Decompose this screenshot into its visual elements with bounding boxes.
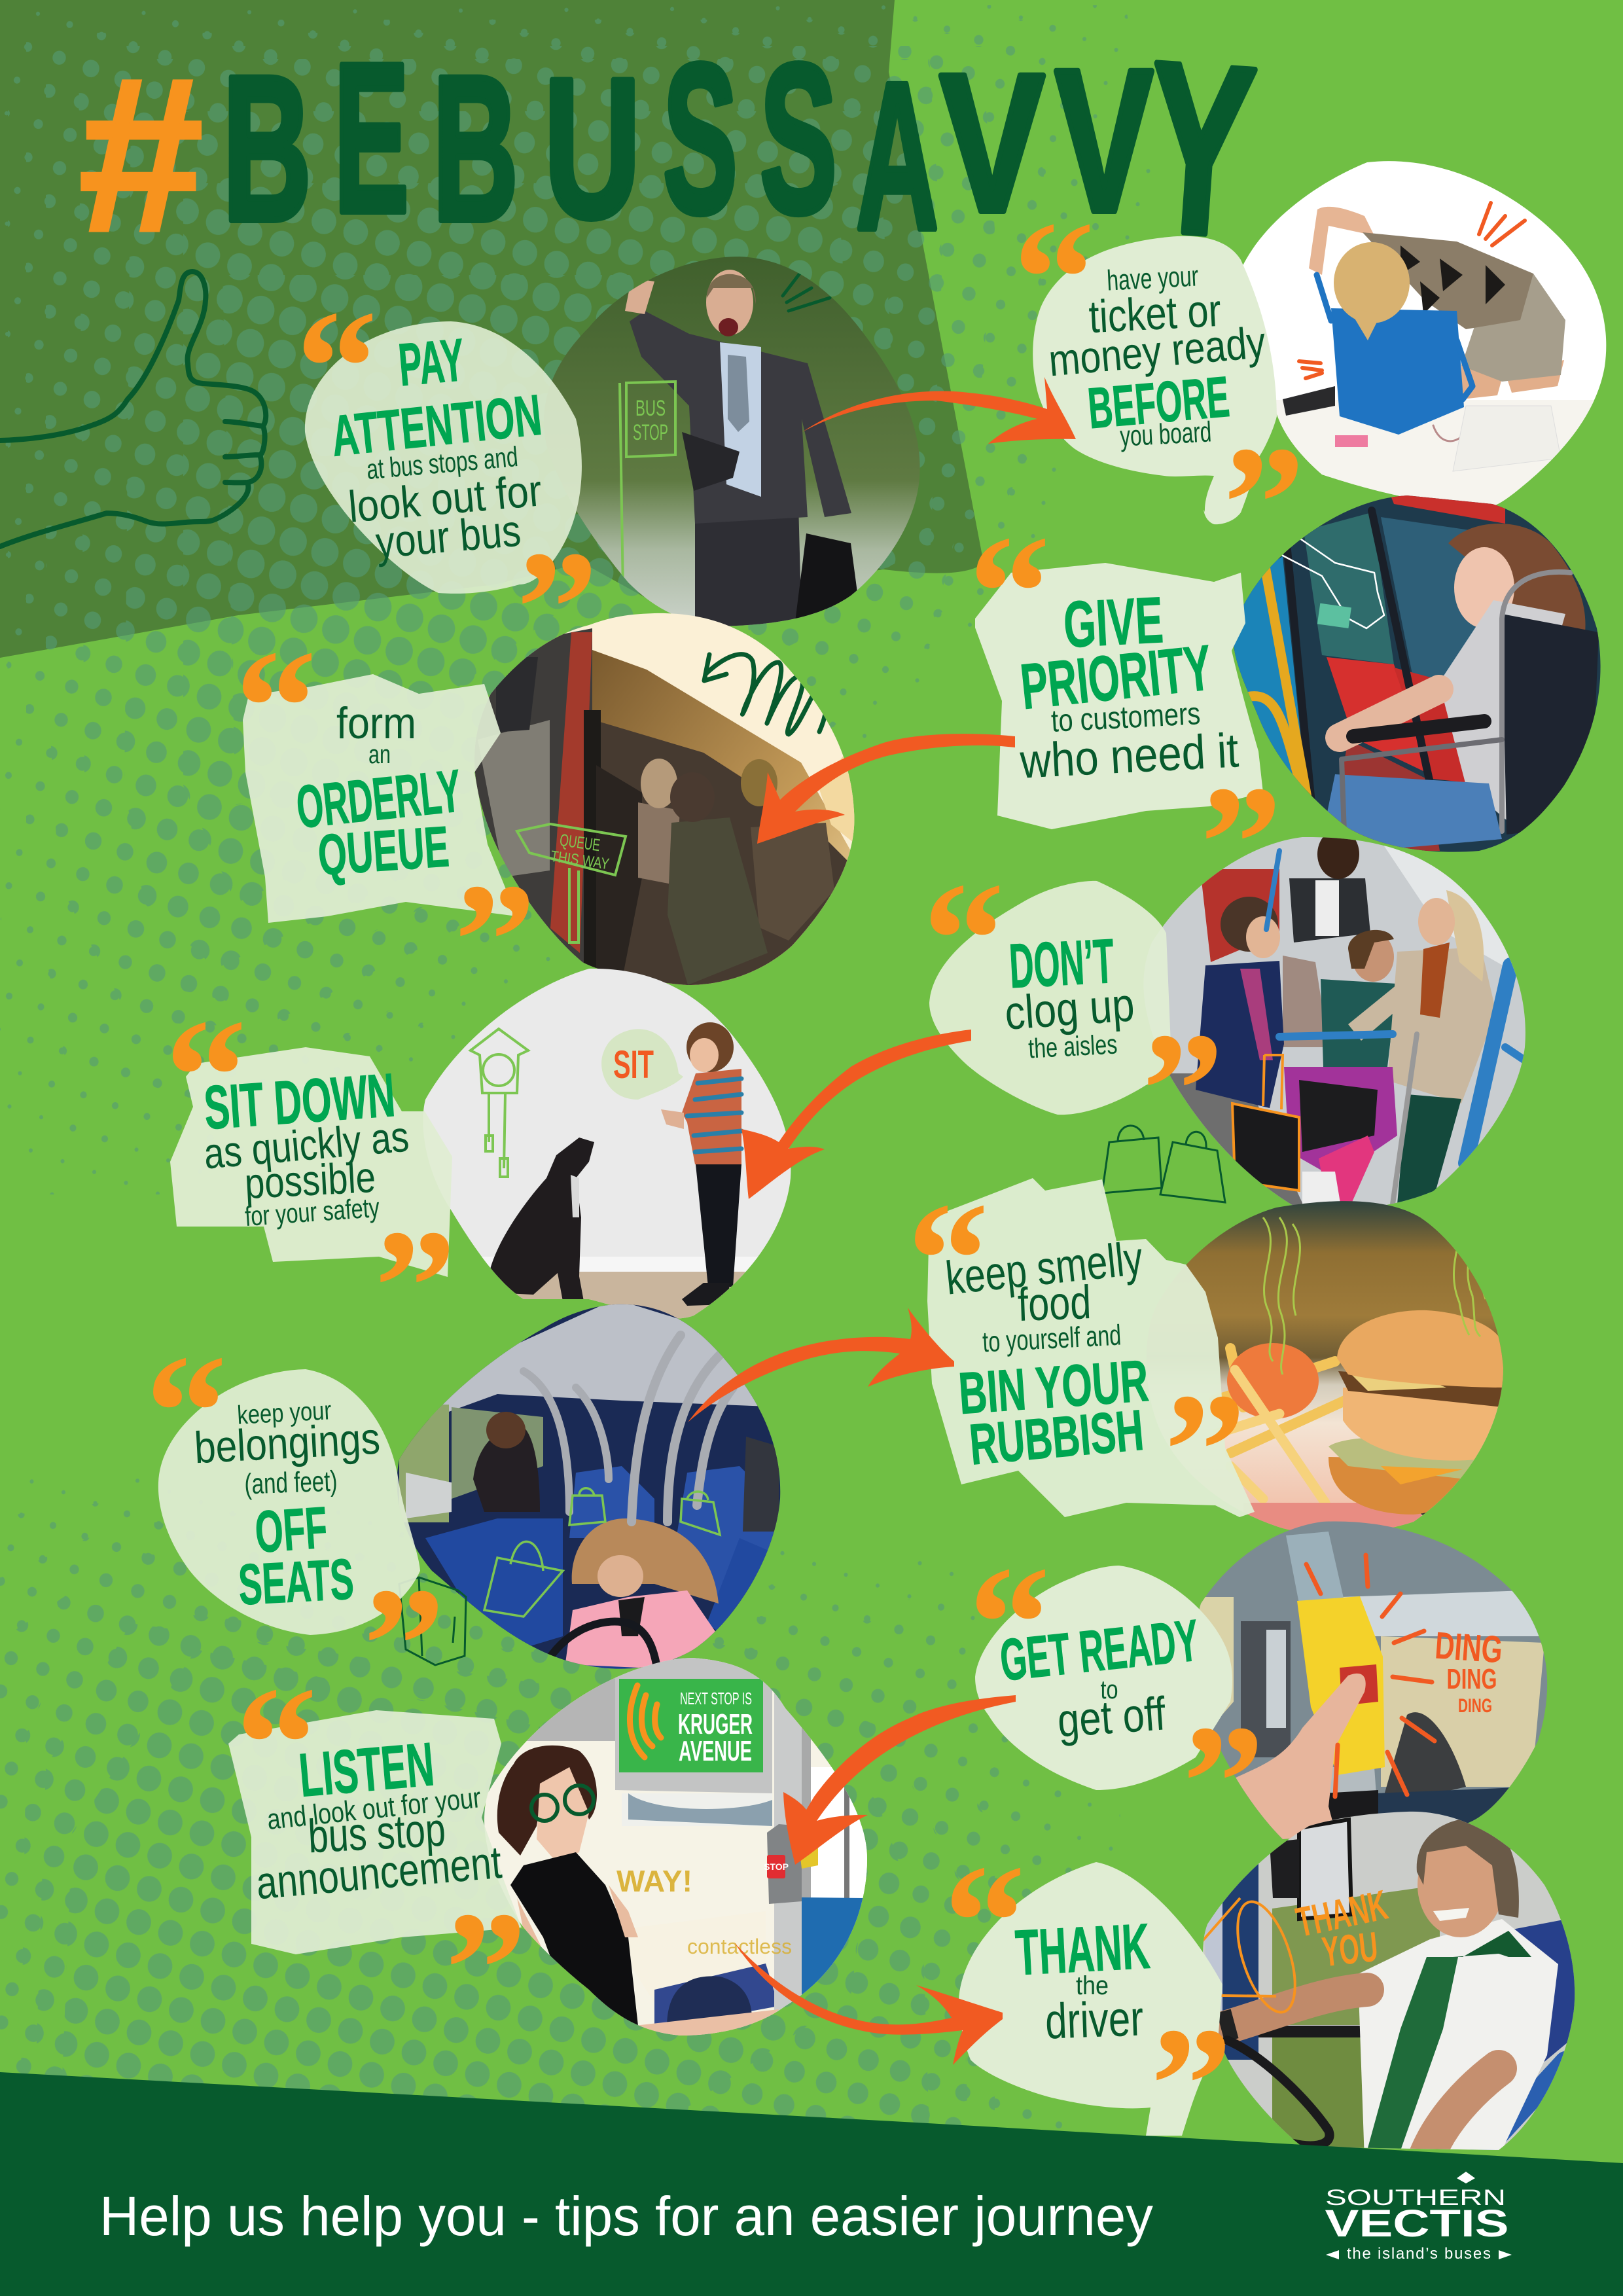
bubble 3: give priority: who need it (1018, 723, 1240, 789)
bubble 6: sit down: for your safety (244, 1192, 380, 1232)
quotation marks: “ (923, 849, 1005, 1030)
bubble 5: don't clog up: DON’T (1008, 926, 1116, 1001)
arrow: aisles to sit down (741, 1030, 971, 1199)
quotation marks: ” (363, 1554, 445, 1736)
bubble 10: listen: announcement (254, 1837, 504, 1909)
quotation marks: ” (1200, 753, 1282, 934)
bubble 10: listen: bus stop (307, 1804, 447, 1863)
quotation marks: “ (236, 1653, 317, 1835)
sketch: DING text: DING (1458, 1695, 1492, 1717)
dark green background shape (0, 0, 984, 658)
bubble 9: get ready to get off: to (1101, 1676, 1118, 1704)
bubble 4: form an orderly queue: an (368, 740, 391, 769)
quotation marks: ” (454, 850, 536, 1031)
next stop screen: KRUGER (678, 1708, 753, 1740)
title: #BEBUSSAVVY: V (1055, 27, 1154, 254)
sketch: green glasses (531, 1785, 594, 1821)
bubble 9: get ready to get off: GET READY (997, 1608, 1202, 1694)
bubble 4: form an orderly queue (243, 674, 517, 923)
sketch: suitcase over photo (1232, 1055, 1299, 1191)
bubble 6: sit down: possible (243, 1153, 377, 1208)
bubble 2: have your ticket: money ready (1046, 317, 1268, 386)
bubble 11: thank the driver: THANK (1014, 1910, 1151, 1988)
bubble 7: keep smelly food: RUBBISH (967, 1397, 1146, 1477)
sketch: ding lines (1306, 1555, 1435, 1797)
photo: man running for bus (552, 257, 920, 626)
sketch: megaphone (1165, 1895, 1306, 2022)
quotation marks: ” (374, 1196, 456, 1378)
logo: Southern Vectis (1325, 2172, 1512, 2263)
sketch: queue this way sign: THIS WAY (550, 848, 610, 873)
bubble 5: don't clog up: clog up (1003, 978, 1136, 1040)
bubble 2: have your ticket: ticket or (1088, 285, 1222, 342)
bubble 10: listen: LISTEN (296, 1729, 437, 1810)
bubble 3: give priority: PRIORITY (1017, 631, 1215, 723)
speech bubble: SIT (601, 1029, 683, 1100)
bubble 6: sit down: SIT DOWN (202, 1060, 397, 1142)
arrow: get off to listen (783, 1695, 1016, 1865)
bubble 8: keep your belongings (158, 1369, 420, 1635)
quotation marks: “ (969, 502, 1050, 683)
arrow: listen to thank (734, 1943, 1003, 2065)
bubble 3: give priority: to customers (1050, 696, 1201, 739)
quotation marks: “ (165, 986, 247, 1167)
icon: thumbs up outline (0, 272, 266, 547)
quotation marks: ” (516, 518, 598, 699)
bubble 4: form an orderly queue: form (336, 698, 416, 748)
bubble 8: keep your belongings: belongings (193, 1414, 382, 1473)
sketch: thank you: YOU (1320, 1923, 1380, 1975)
sketch: white hand (1281, 539, 1385, 630)
logo: Southern Vectis: SOUTHERN (1325, 2185, 1506, 2210)
sketch: motion lines (783, 268, 830, 311)
title: #BEBUSSAVVY: A (856, 39, 938, 273)
bubble 11: thank the driver: driver (1044, 1990, 1145, 2050)
photo: woman searching bag (1243, 161, 1606, 505)
quotation marks: ” (1223, 413, 1305, 594)
sketch: shopping bags (1102, 1126, 1225, 1202)
bubble 1: pay attention: at bus stops and (365, 441, 519, 486)
sketch: green bags on seats (484, 1488, 720, 1617)
bubble 9: get ready to get off: get off (1056, 1687, 1168, 1748)
bubble 2: have your ticket: you board (1119, 416, 1212, 453)
sketch: bus stop sign: BUS (635, 396, 666, 421)
title: #BEBUSSAVVY: E (334, 19, 409, 257)
bubble 11: thank the driver (959, 1862, 1222, 2136)
photo: bell push button (1191, 1515, 1558, 1842)
bubble 2: have your ticket: have your (1106, 260, 1199, 297)
bubble 4: form an orderly queue: ORDERLY (293, 757, 464, 841)
title: #BEBUSSAVVY: V (940, 33, 1045, 253)
bubble 7: keep smelly food: to yourself and (982, 1319, 1122, 1359)
photo: queue at bus door (475, 613, 855, 985)
title: #BEBUSSAVVY: S (760, 20, 837, 257)
title: #BEBUSSAVVY: # (79, 32, 204, 277)
quotation marks: ” (1164, 1360, 1246, 1541)
photo: woman listening to announcement: STOP (764, 1861, 789, 1872)
sketch: thank you (1292, 1881, 1391, 1975)
footer tagline: Help us help you - tips for an easier journey (99, 2185, 1153, 2247)
sketch: bus stop sign (620, 382, 675, 592)
bubble 8: keep your belongings: OFF (253, 1495, 329, 1566)
title: #BEBUSSAVVY: Y (1138, 11, 1262, 288)
next stop screen: AVENUE (679, 1735, 752, 1767)
bubble 9: get ready to get off (975, 1566, 1232, 1790)
quotation marks: ” (1142, 999, 1224, 1181)
bubble 6: sit down: as quickly as (202, 1112, 411, 1178)
quotation marks: “ (969, 1533, 1050, 1714)
bubble 1: pay attention: PAY (396, 327, 467, 399)
title: #BEBUSSAVVY: U (544, 38, 641, 259)
bubble 5: don't clog up: the aisles (1027, 1028, 1118, 1064)
reflected window lettering: WAY! (616, 1864, 692, 1898)
arrow: seats to rubbish (688, 1308, 954, 1422)
halftone dots pattern (0, 5, 1158, 2160)
bubble 6: sit down (170, 1047, 452, 1277)
photo: bus upper deck seats (393, 1296, 785, 1682)
sketch: thank you: THANK (1292, 1881, 1391, 1946)
photo: crowded aisle with pram (1162, 837, 1525, 1206)
title: #BEBUSSAVVY (79, 11, 1262, 288)
sketch: scribble arrow (704, 655, 827, 734)
bubble 7: keep smelly food (927, 1178, 1255, 1517)
quotation marks: “ (944, 1831, 1026, 2013)
sketch: green suitcase (399, 1577, 466, 1665)
bubble 4: form an orderly queue: QUEUE (316, 814, 451, 888)
photo: woman listening to announcement (471, 1649, 877, 2042)
sketch: queue this way sign: QUEUE (558, 830, 601, 855)
bubble 5: don't clog up (929, 881, 1171, 1115)
bubble 10: listen: and look out for your (266, 1782, 482, 1836)
quotation marks: “ (907, 1169, 989, 1350)
bubble 8: keep your belongings: keep your (236, 1396, 332, 1430)
title: #BEBUSSAVVY: B (223, 33, 312, 264)
sketch: cuckoo clock (471, 1029, 528, 1177)
bubble 1: pay attention (305, 321, 582, 594)
quotation marks (145, 188, 1305, 2176)
bubble 2: have your ticket (1033, 236, 1277, 524)
arrow: man to ticket (802, 377, 1076, 444)
logo: Southern Vectis: the island’s buses (1347, 2245, 1491, 2263)
title: #BEBUSSAVVY: S (663, 20, 738, 257)
footer band (0, 2072, 1623, 2296)
bubble 7: keep smelly food: BIN YOUR (957, 1348, 1150, 1427)
bubble 3: give priority (975, 563, 1263, 829)
sketch: DING text (1434, 1624, 1504, 1717)
arrow: priority to queue (757, 734, 1015, 844)
quotation marks: “ (296, 277, 378, 458)
bubble 2: have your ticket: BEFORE (1085, 364, 1232, 440)
sketch: bus stop sign: STOP (633, 420, 668, 445)
photo: bus driver (1165, 1806, 1584, 2160)
photo: wheelchair user boarding (1234, 495, 1601, 852)
bubble 1: pay attention: ATTENTION (329, 382, 544, 469)
sketch: DING text: DING (1434, 1624, 1504, 1672)
quotation marks: “ (145, 1321, 227, 1503)
sketch: DING text: DING (1446, 1663, 1497, 1695)
sketch: queue this way sign (517, 824, 626, 942)
photo: woman listening to announcement: contactless (687, 1935, 792, 1958)
quotation marks: ” (1150, 1994, 1232, 2176)
bubble 8: keep your belongings: SEATS (237, 1547, 355, 1617)
bubble 1: pay attention: look out for (346, 465, 544, 532)
logo: Southern Vectis: VECTIS (1325, 2202, 1509, 2245)
next stop screen: NEXT STOP IS (680, 1689, 752, 1708)
bubble 7: keep smelly food: keep smelly (943, 1232, 1145, 1305)
quotation marks: “ (235, 617, 317, 798)
bubble 11: thank the driver: the (1076, 1971, 1109, 2000)
sketch: smell lines (1263, 1194, 1492, 1374)
quotation marks: ” (1183, 1692, 1264, 1873)
photo: burger and fries (1139, 1194, 1512, 1545)
bubble 8: keep your belongings: (and feet) (244, 1465, 338, 1500)
bubble 7: keep smelly food: food (1017, 1276, 1092, 1331)
next stop screen (619, 1679, 763, 1772)
bubble 10: listen (228, 1710, 522, 1954)
speech bubble: SIT: SIT (613, 1043, 654, 1086)
quotation marks: “ (1013, 188, 1095, 369)
title: #BEBUSSAVVY: B (433, 33, 518, 264)
photo: boy training dog (412, 962, 798, 1331)
bubble 3: give priority: GIVE (1061, 583, 1165, 662)
quotation marks: ” (445, 1878, 527, 2060)
bubble 1: pay attention: your bus (374, 506, 523, 568)
